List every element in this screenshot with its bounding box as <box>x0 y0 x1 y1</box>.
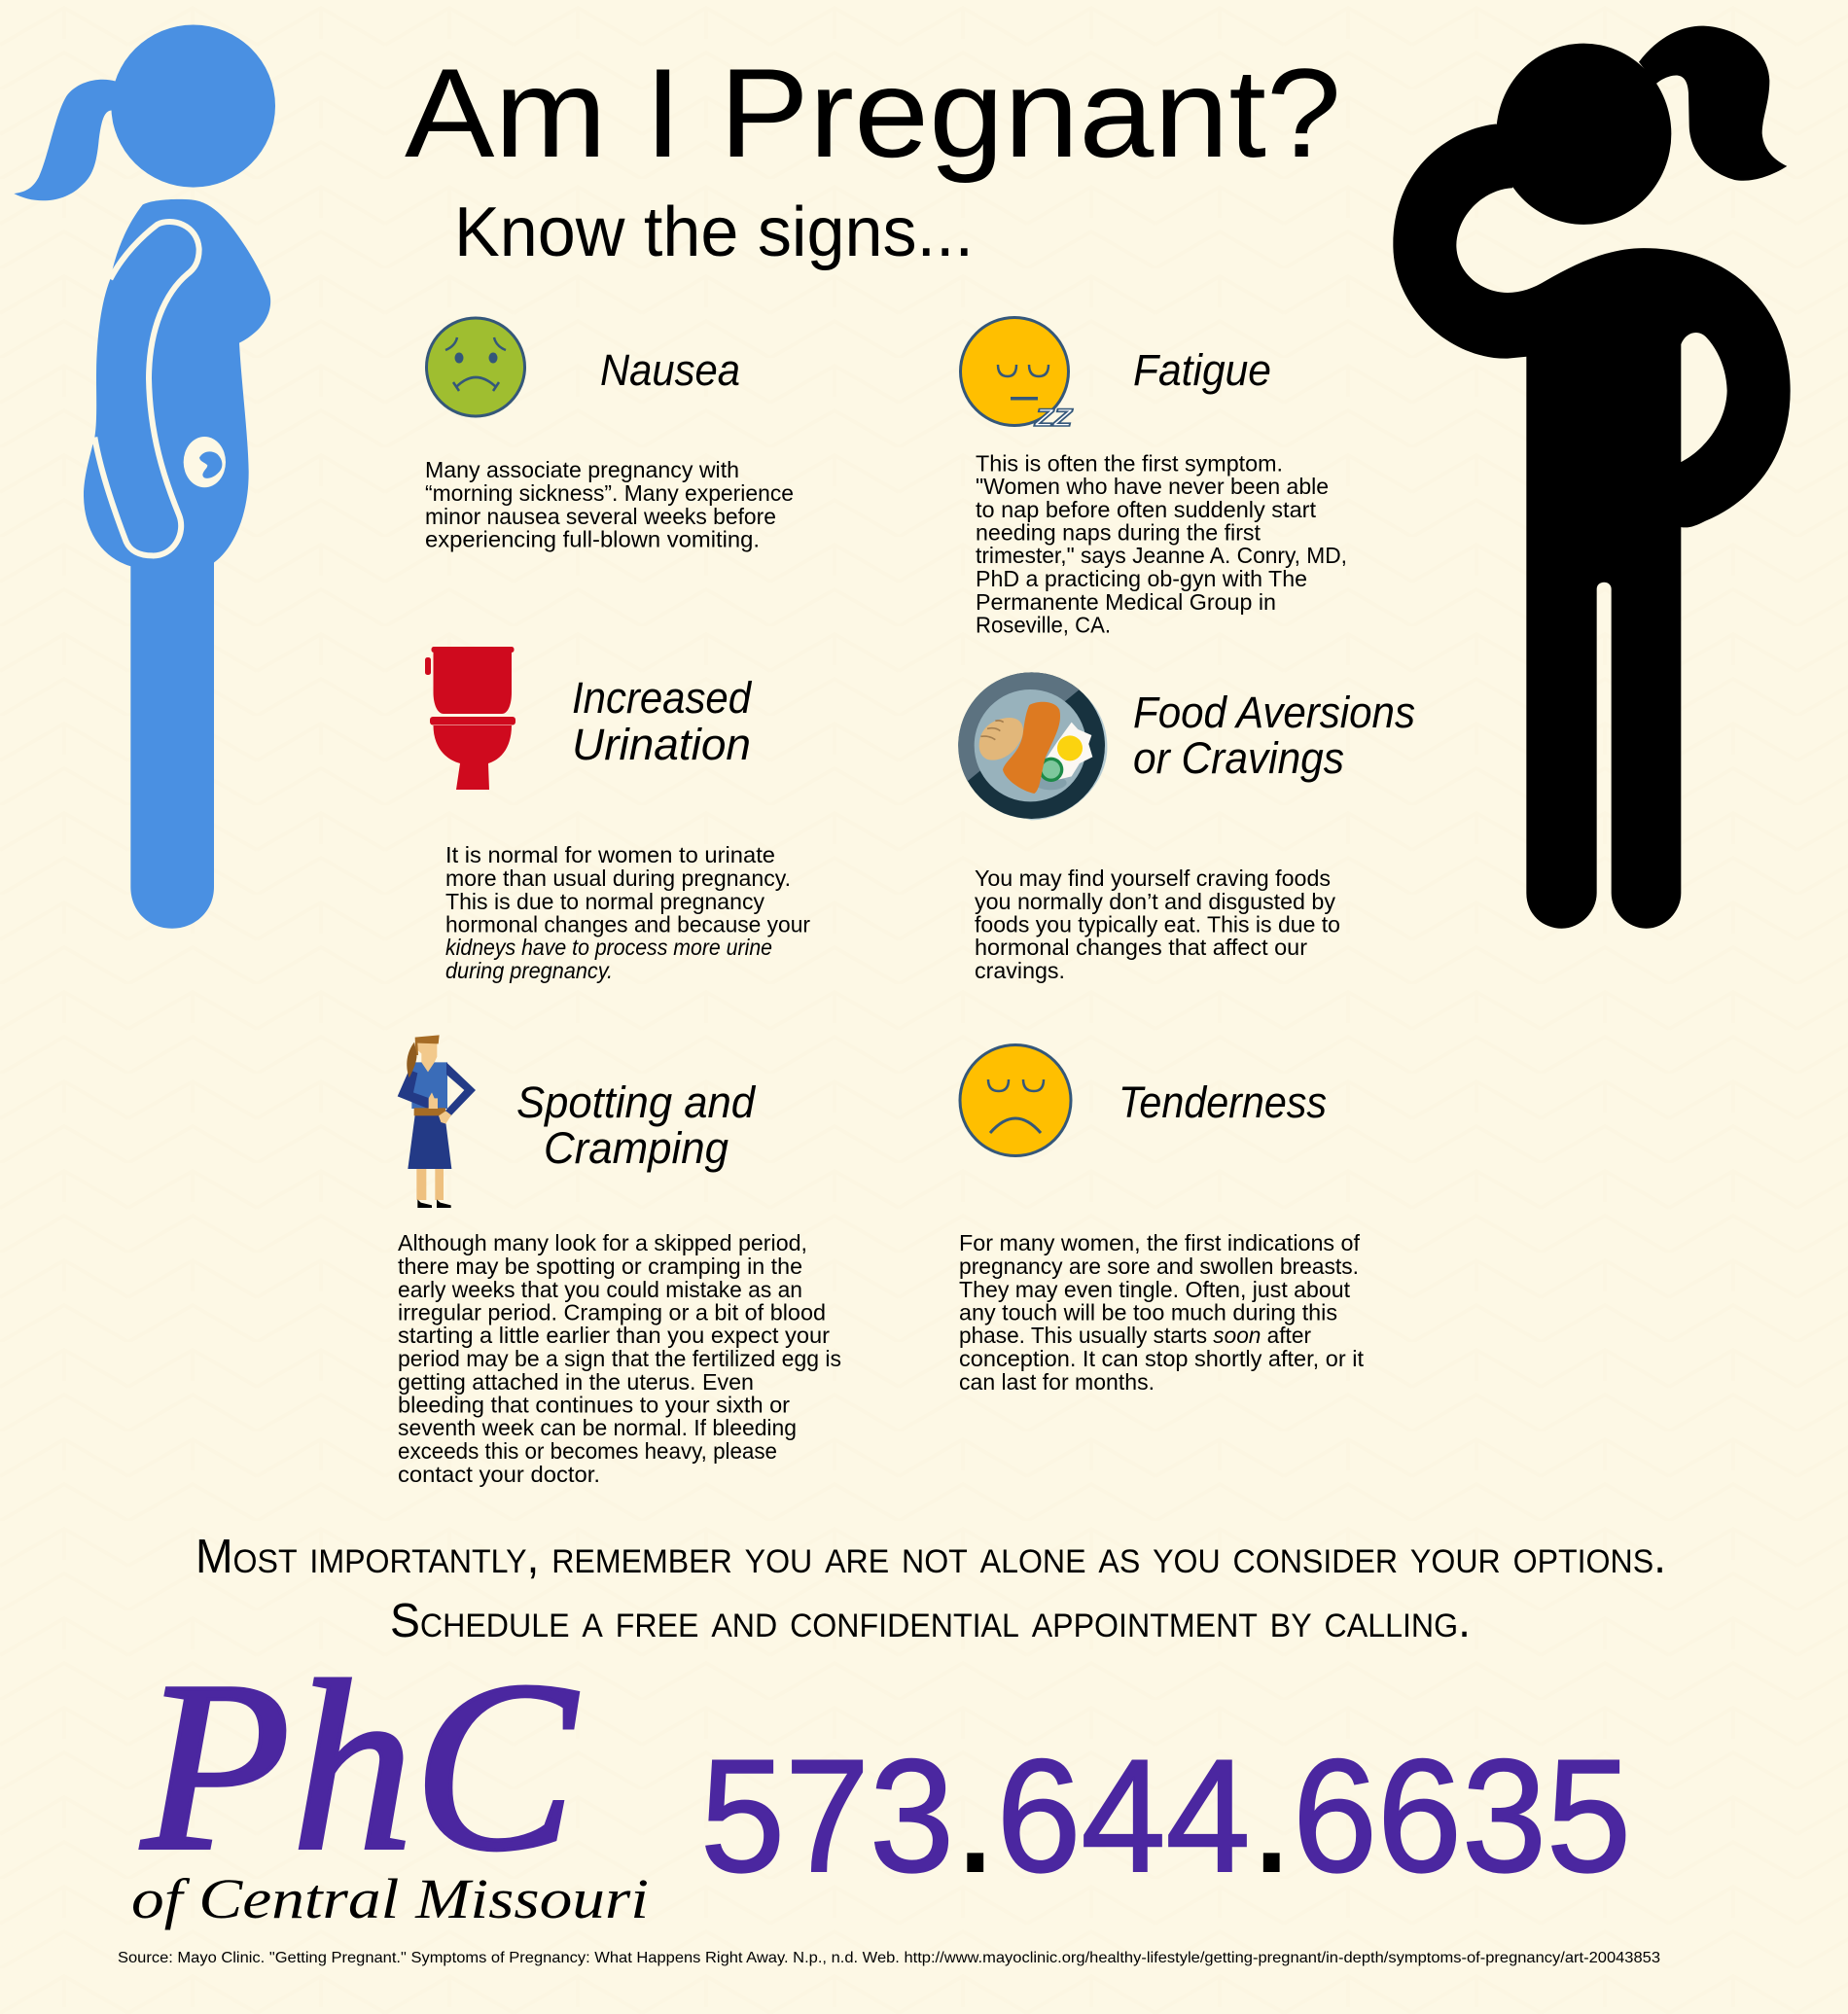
heading: increased urination <box>572 673 753 769</box>
icon: food plate <box>958 672 1107 820</box>
text: nausea: Many associate pregnancy with <box>425 457 739 482</box>
text: spotting and cramping <box>398 1230 841 1487</box>
text: fatigue: to nap before often suddenly start <box>976 497 1317 522</box>
closing message: Schedule a free and confidential appointment by calling. <box>390 1595 1471 1647</box>
text: increased urination: This is due to normal pregnancy <box>445 889 764 914</box>
text: increased urination: hormonal changes and because your <box>445 912 810 937</box>
heading: increased urination: Urination <box>572 720 751 769</box>
text: tenderness: can last for months. <box>959 1369 1155 1395</box>
text: food aversions: cravings. <box>975 958 1065 983</box>
text: spotting and cramping: Although many look for a skipped period, <box>398 1230 807 1255</box>
text: nausea: minor nausea several weeks before <box>425 504 776 529</box>
text: increased urination: more than usual during pregnancy. <box>445 866 791 891</box>
logo: PhC of Central Missouri: PhC <box>140 1632 579 1901</box>
text: tenderness: conception. It can stop shortly after, or it <box>959 1346 1365 1371</box>
text: nausea <box>425 457 794 552</box>
text: tenderness <box>959 1230 1365 1395</box>
heading: food aversions or cravings: Food Aversions <box>1133 688 1415 737</box>
text: food aversions <box>975 866 1340 983</box>
text: spotting and cramping: early weeks that you could mistake as an <box>398 1277 802 1302</box>
text: increased urination <box>445 842 810 983</box>
icon: toilet <box>425 647 515 790</box>
text: nausea: experiencing full-blown vomiting. <box>425 527 760 552</box>
icon: sad face <box>960 1044 1071 1155</box>
text: fatigue: trimester," says Jeanne A. Conry, MD, <box>976 543 1347 568</box>
text: food aversions: hormonal changes that affect our <box>975 935 1307 960</box>
heading: food aversions or cravings: or Cravings <box>1133 733 1344 783</box>
heading: food aversions or cravings <box>1133 688 1415 783</box>
text: spotting and cramping: seventh week can be normal. If bleeding <box>398 1415 797 1440</box>
heading: nausea: Nausea <box>600 345 740 395</box>
text: tenderness: For many women, the first indications of <box>959 1230 1361 1255</box>
text: spotting and cramping: starting a little earlier than you expect your <box>398 1323 830 1348</box>
text: increased urination: kidneys have to process more urine <box>445 935 772 960</box>
text: food aversions: You may find yourself craving foods <box>975 866 1331 891</box>
icon: sleepy face: ZZ <box>1034 405 1074 432</box>
text: spotting and cramping: period may be a sign that the fertilized egg is <box>398 1346 841 1371</box>
text: spotting and cramping: exceeds this or becomes heavy, please <box>398 1438 777 1464</box>
icon: nausea face <box>426 318 525 416</box>
text: tenderness: They may even tingle. Often, just about <box>959 1277 1351 1302</box>
icon: woman silhouette scratching head <box>1393 26 1791 929</box>
icon: standing woman <box>398 1035 476 1208</box>
icon: sleepy face <box>961 317 1074 432</box>
heading: increased urination: Increased <box>572 673 753 723</box>
text: fatigue: This is often the first symptom. <box>976 451 1283 477</box>
text: fatigue: Roseville, CA. <box>976 613 1111 638</box>
text: spotting and cramping: there may be spotting or cramping in the <box>398 1254 802 1279</box>
text: increased urination: during pregnancy. <box>445 958 613 983</box>
heading: spotting and cramping <box>516 1078 757 1173</box>
closing message: Most importantly, remember you are not alone as you consider your options. <box>195 1531 1666 1583</box>
text: spotting and cramping: irregular period. Cramping or a bit of blood <box>398 1299 826 1325</box>
title: Am I Pregnant? <box>405 42 1341 184</box>
text: increased urination: It is normal for women to urinate <box>445 842 775 867</box>
text: fatigue <box>976 451 1347 638</box>
text: fatigue: "Women who have never been able <box>976 474 1329 499</box>
phone number: 573.644.6635 <box>700 1726 1631 1905</box>
text: tenderness: phase. This usually starts soon after <box>959 1323 1311 1348</box>
text: food aversions: foods you typically eat. This is due to <box>975 912 1340 937</box>
text: fatigue: needing naps during the first <box>976 519 1262 545</box>
heading: spotting and cramping: Spotting and <box>516 1078 757 1127</box>
source citation: Source: Mayo Clinic. "Getting Pregnant." Symptoms of Pregnancy: What Happens Right Away. N.p., n.d. Web. http://www.mayoclinic.org/healthy-lifestyle/getting-pregnant/in-depth/symptoms-of-pregnancy/art-20043853 <box>118 1950 1660 1966</box>
subtitle: Know the signs... <box>454 194 974 271</box>
logo: PhC of Central Missouri: of Central Missouri <box>131 1867 649 1930</box>
text: spotting and cramping: getting attached in the uterus. Even <box>398 1369 754 1395</box>
text: nausea: “morning sickness”. Many experience <box>425 480 794 506</box>
heading: tenderness: Tenderness <box>1119 1078 1327 1127</box>
text: fatigue: Permanente Medical Group in <box>976 589 1276 615</box>
text: food aversions: you normally don’t and disgusted by <box>975 889 1335 914</box>
closing message <box>195 1531 1666 1647</box>
text: tenderness: pregnancy are sore and swollen breasts. <box>959 1254 1359 1279</box>
text: spotting and cramping: contact your doctor. <box>398 1462 600 1487</box>
text: tenderness: any touch will be too much during this <box>959 1299 1337 1325</box>
text: fatigue: PhD a practicing ob-gyn with The <box>976 566 1307 591</box>
icon: pregnant woman side silhouette <box>14 25 275 929</box>
text: spotting and cramping: bleeding that continues to your sixth or <box>398 1393 790 1418</box>
heading: spotting and cramping: Cramping <box>544 1123 729 1173</box>
heading: fatigue: Fatigue <box>1133 345 1271 395</box>
